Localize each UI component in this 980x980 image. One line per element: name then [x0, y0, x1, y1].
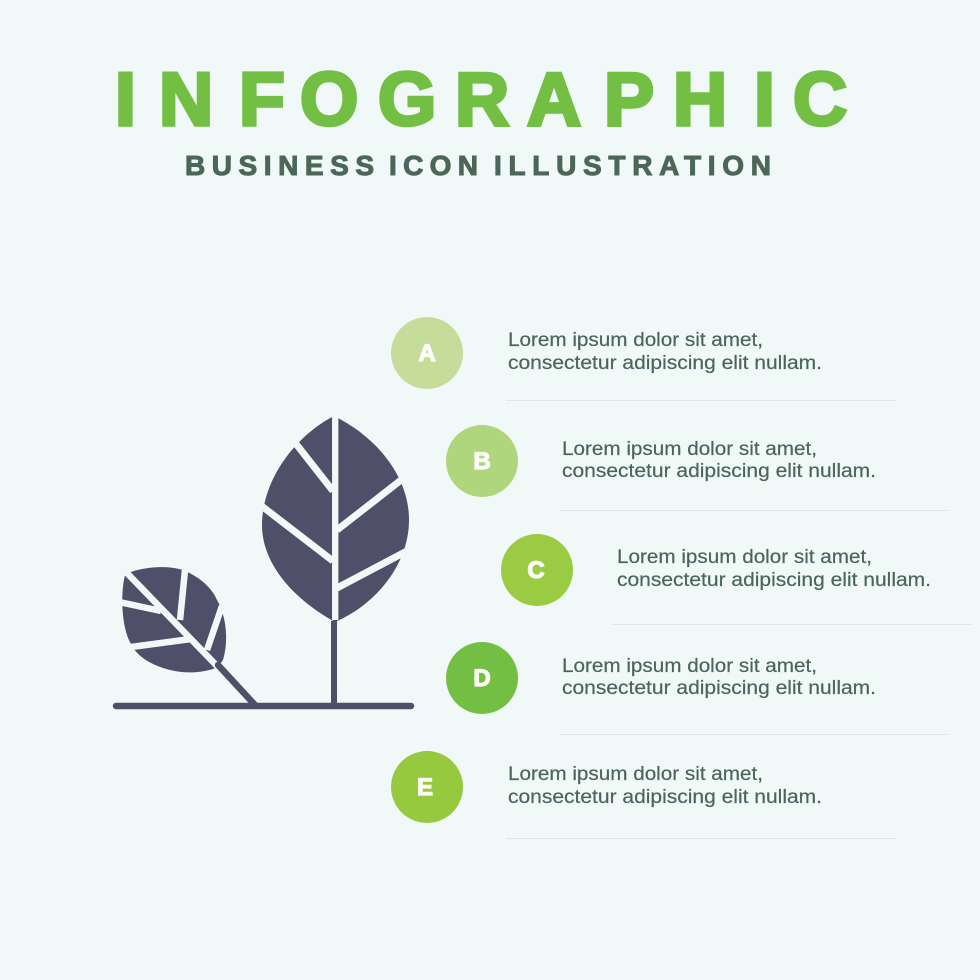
subtitle: BUSINESS — [185, 150, 374, 181]
item B: Lorem ipsum dolor sit amet, — [562, 439, 817, 460]
item B: B — [473, 448, 491, 475]
item E — [391, 751, 896, 839]
item A: Lorem ipsum dolor sit amet, — [508, 330, 763, 351]
icon: plant with two leaves — [116, 412, 411, 706]
subtitle: ICON — [389, 150, 478, 181]
item C: Lorem ipsum dolor sit amet, — [617, 547, 872, 568]
item E: Lorem ipsum dolor sit amet, — [508, 764, 763, 785]
item C: C — [527, 557, 545, 584]
title: INFOGRAPHIC — [115, 57, 847, 141]
item B: consectetur adipiscing elit nullam. — [562, 461, 876, 482]
item E: consectetur adipiscing elit nullam. — [508, 787, 822, 808]
item A: consectetur adipiscing elit nullam. — [508, 353, 822, 374]
item D: Lorem ipsum dolor sit amet, — [562, 656, 817, 677]
large leaf — [259, 412, 409, 706]
item B — [446, 425, 949, 511]
item C — [501, 534, 972, 625]
item A — [391, 317, 896, 401]
item D: consectetur adipiscing elit nullam. — [562, 678, 876, 699]
item E: E — [417, 774, 433, 801]
item D: D — [473, 665, 491, 692]
item D — [446, 642, 949, 735]
ground line — [116, 703, 411, 709]
subtitle: ILLUSTRATION — [494, 150, 771, 181]
item C: consectetur adipiscing elit nullam. — [617, 570, 931, 591]
item A: A — [418, 340, 436, 367]
small leaf — [119, 567, 255, 705]
